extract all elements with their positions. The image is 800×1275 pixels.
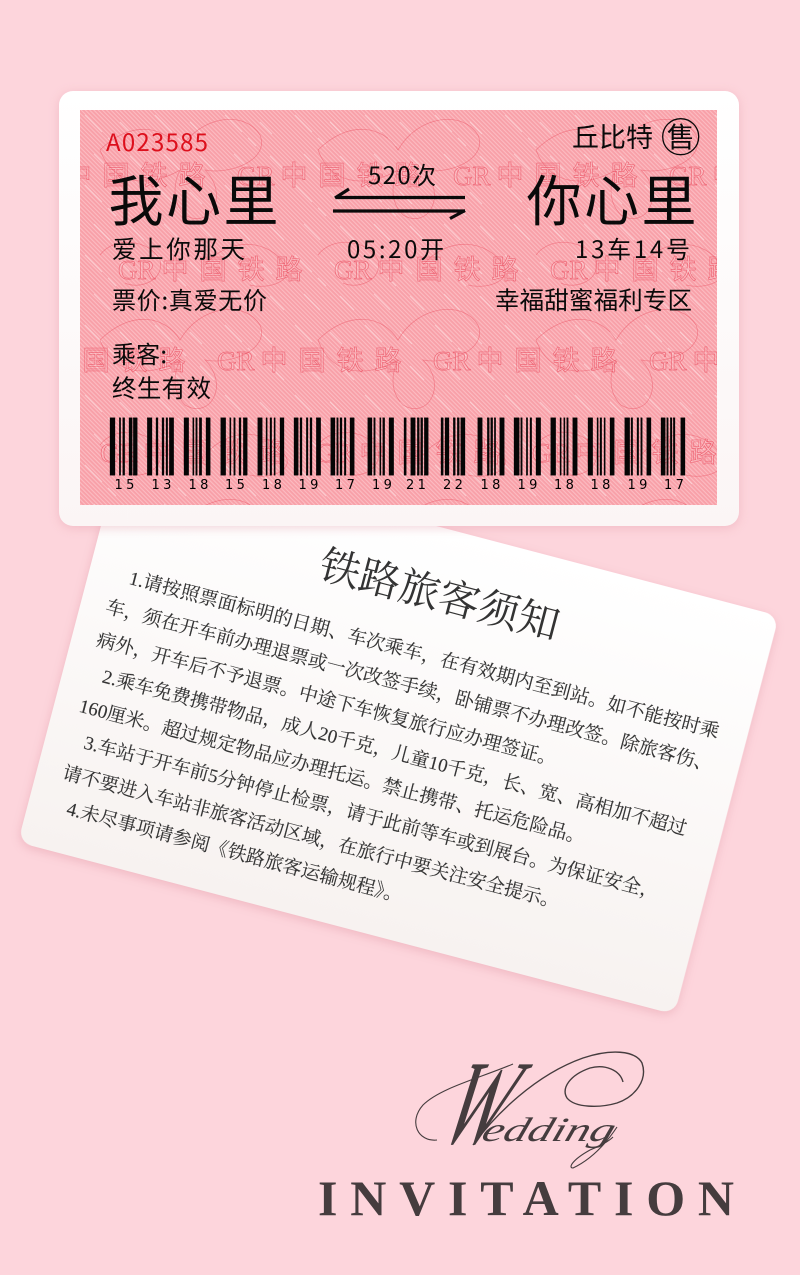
notice text: 4.未尽事项请参阅《铁路旅客运输规程》。 <box>64 798 405 907</box>
arrows <box>333 189 465 218</box>
ticket white frame <box>59 91 739 526</box>
panel: passenger notice card <box>18 444 779 1014</box>
passenger validity: 终生有效 <box>112 370 211 405</box>
barcode digits: 22 <box>443 478 466 493</box>
barcode digits: 18 <box>480 478 504 493</box>
ticket pink security paper: GR中国铁路 <box>550 248 746 287</box>
barcode digits: 17 <box>664 478 687 493</box>
barcode digits: 15 <box>225 478 248 493</box>
barcode digits: 19 <box>372 478 395 493</box>
train number: 520次 <box>368 156 436 191</box>
wedding script title <box>416 1036 643 1169</box>
ticket pink security paper: GR中国铁路 <box>433 339 629 378</box>
notice text <box>51 563 724 975</box>
barcode digits: 19 <box>628 478 651 493</box>
departure station: 我心里 <box>108 157 278 237</box>
notice text: 3.车站于开车前5分钟停止检票，请于此前等车或到展台。为保证安全， <box>82 732 662 904</box>
ticket pink security paper: GR中国铁路 <box>334 248 530 287</box>
barcode digits: 19 <box>298 478 322 493</box>
barcode digits: 18 <box>188 478 212 493</box>
notice heading: 铁路旅客须知 <box>314 532 567 651</box>
seat: 13车14号 <box>575 230 690 265</box>
notice text: 病外，开车后不予退票。中途下车恢复旅行应办理签证。 <box>94 629 559 771</box>
barcode <box>110 418 685 475</box>
notice text: 160厘米。超过规定物品应办理托运。禁止携带、托运危险品。 <box>77 695 588 849</box>
barcode digits: 21 <box>406 478 429 493</box>
ticket pink security paper: GR中国铁路 <box>100 431 296 470</box>
barcode digits: 15 <box>114 478 138 493</box>
ticket pink security paper: GR中国铁路 <box>118 248 314 287</box>
ticket pink security paper: GR中国铁路 <box>453 154 649 193</box>
date: 爱上你那天 <box>112 231 245 266</box>
ticket number: A023585 <box>106 123 208 158</box>
barcode digits: 13 <box>152 478 175 493</box>
ticket pink security paper: GR中国铁路 <box>316 431 512 470</box>
ticket pink security paper: GR中国铁路 <box>21 154 217 193</box>
arrival station: 你心里 <box>526 157 696 237</box>
ticket pink security paper: GR中国铁路 <box>217 339 413 378</box>
departure time: 05:20开 <box>347 230 444 265</box>
notice text: 2.乘车免费携带物品，成人20千克，儿童10千克，长、宽、高相加不超过 <box>100 666 689 840</box>
issuer: 丘比特 <box>572 116 653 155</box>
price: 票价:真爱无价 <box>112 281 267 316</box>
icon: sold stamp: 售 <box>667 116 695 156</box>
notice text: 1.请按照票面标明的日期、车次乘车，在有效期内至到站。如不能按时乘 <box>127 567 722 743</box>
ticket pink security paper: GR中国铁路 <box>237 154 433 193</box>
zone: 幸福甜蜜福利专区 <box>495 282 692 317</box>
decorative swashes <box>416 1052 643 1168</box>
notice text: 车，须在开车前办理退票或一次改签手续，卧铺票不办理改签。除旅客伤、 <box>103 596 715 776</box>
notice text: 请不要进入车站非旅客活动区域，在旅行中要关注安全提示。 <box>60 762 562 913</box>
barcode digits: 17 <box>335 478 358 493</box>
barcode digits <box>114 478 687 493</box>
wedding word: initial: W <box>425 1036 545 1169</box>
ticket pink security paper: GR中国铁路 <box>532 431 728 470</box>
barcode digits: 18 <box>554 478 577 493</box>
invitation title: INVITATION <box>318 1170 734 1226</box>
panel: train ticket <box>56 90 742 532</box>
passenger label: 乘客: <box>112 335 167 370</box>
ticket pink security paper <box>80 110 717 505</box>
wedding word: letters: edding <box>477 1111 621 1149</box>
barcode digits: 19 <box>518 478 541 493</box>
barcode digits: 18 <box>262 478 285 493</box>
notice card background <box>18 444 779 1014</box>
barcode digits: 18 <box>590 478 614 493</box>
ticket pink security paper: GR中国铁路 <box>1 339 197 378</box>
